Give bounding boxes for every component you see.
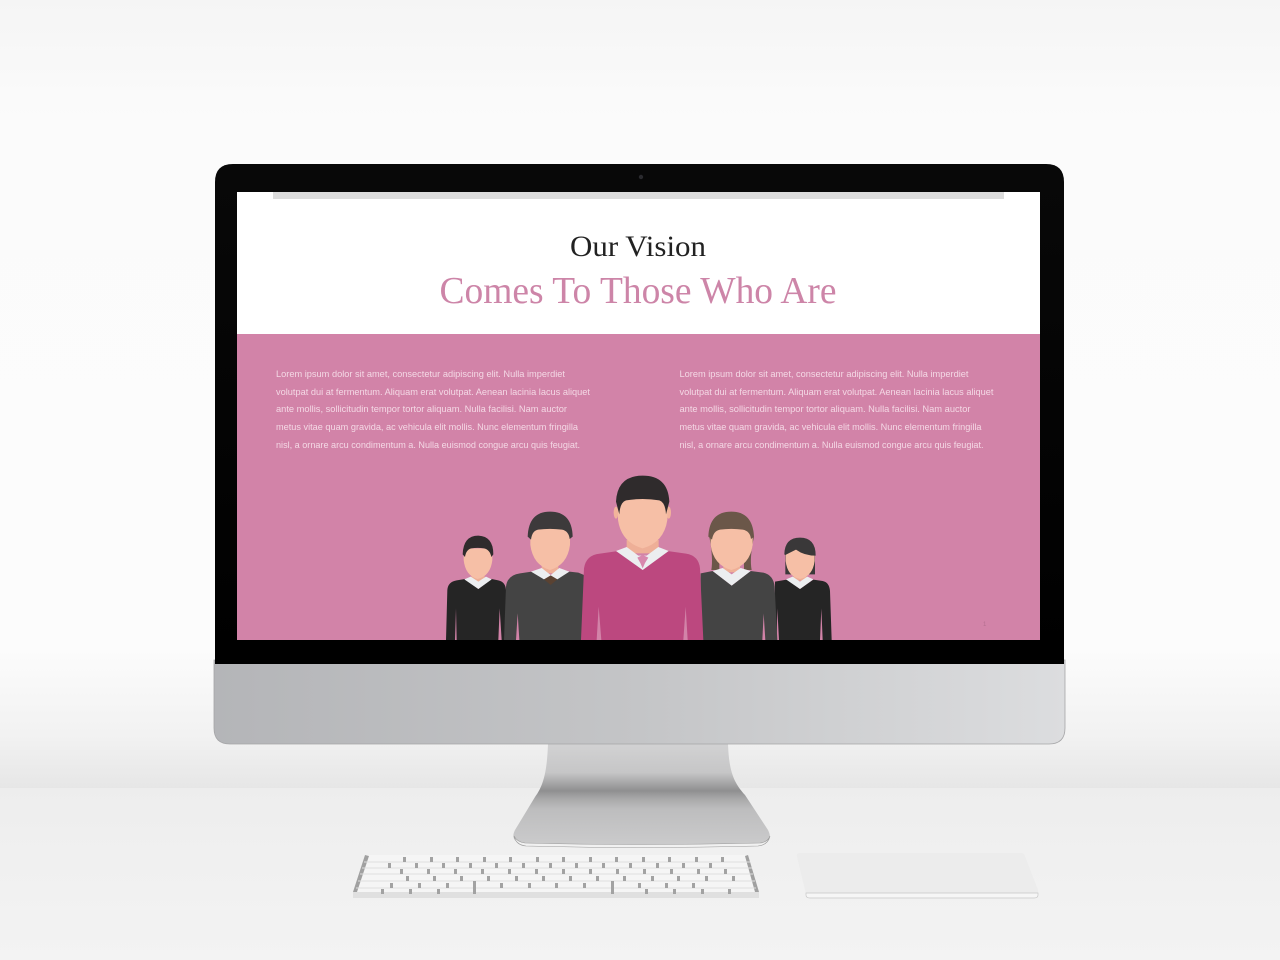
- text block: right column: nisl, a ornare arcu condimentum a. Nulla euismod congue arcu quis feugiat.: [680, 440, 984, 450]
- top grey strip: [273, 192, 1004, 199]
- keyboard: [353, 855, 759, 898]
- keyboard body: [353, 855, 759, 898]
- text block: left column: volutpat dui at fermentum. Aliquam erat volutpat. Aenean lacinia lacus aliquet: [276, 387, 590, 397]
- subtitle: Comes To Those Who Are: Comes To Those Who Are: [440, 270, 836, 312]
- text block: right column: ante mollis, sollicitudin tempor tortor aliquam. Nulla facilisi. Nam auctor: [680, 404, 970, 414]
- text block: left column: metus vitae quam gravida, ac vehicula elit mollis. Nunc elementum fringilla: [276, 422, 579, 432]
- title: Our Vision: Our Vision: [570, 230, 706, 263]
- keyboard row lines: [356, 862, 756, 888]
- text block: right column: [680, 369, 994, 450]
- page number: 1: [983, 622, 987, 628]
- text block: left column: [276, 369, 590, 450]
- person: centre man in magenta sweater: [581, 476, 703, 640]
- person: right woman: [701, 512, 777, 640]
- keyboard key gaps: [381, 857, 735, 894]
- person: left man with tie: [504, 512, 584, 640]
- text block: left column: ante mollis, sollicitudin tempor tortor aliquam. Nulla facilisi. Nam auctor: [276, 404, 567, 414]
- webcam: [639, 175, 643, 179]
- person: far right woman: [775, 538, 832, 640]
- person: far left man: [446, 536, 507, 640]
- slide pink panel: [237, 334, 1040, 640]
- text block: left column: Lorem ipsum dolor sit amet, consectetur adipiscing elit. Nulla imperdiet: [276, 369, 565, 379]
- illustration: team of five people: [446, 476, 832, 640]
- monitor stand: [513, 744, 770, 848]
- monitor chin: [214, 660, 1065, 744]
- text block: right column: Lorem ipsum dolor sit amet, consectetur adipiscing elit. Nulla imperdiet: [680, 369, 969, 379]
- trackpad: [797, 853, 1038, 898]
- text block: right column: volutpat dui at fermentum. Aliquam erat volutpat. Aenean lacinia lacus aliquet: [680, 387, 994, 397]
- slide screen: [237, 192, 1040, 640]
- text block: left column: nisl, a ornare arcu condimentum a. Nulla euismod congue arcu quis feugiat.: [276, 440, 580, 450]
- slide top white area: [237, 192, 1040, 334]
- monitor bezel: [215, 164, 1064, 664]
- text block: right column: metus vitae quam gravida, ac vehicula elit mollis. Nunc elementum fringilla: [680, 422, 982, 432]
- background: desk: [0, 788, 1280, 960]
